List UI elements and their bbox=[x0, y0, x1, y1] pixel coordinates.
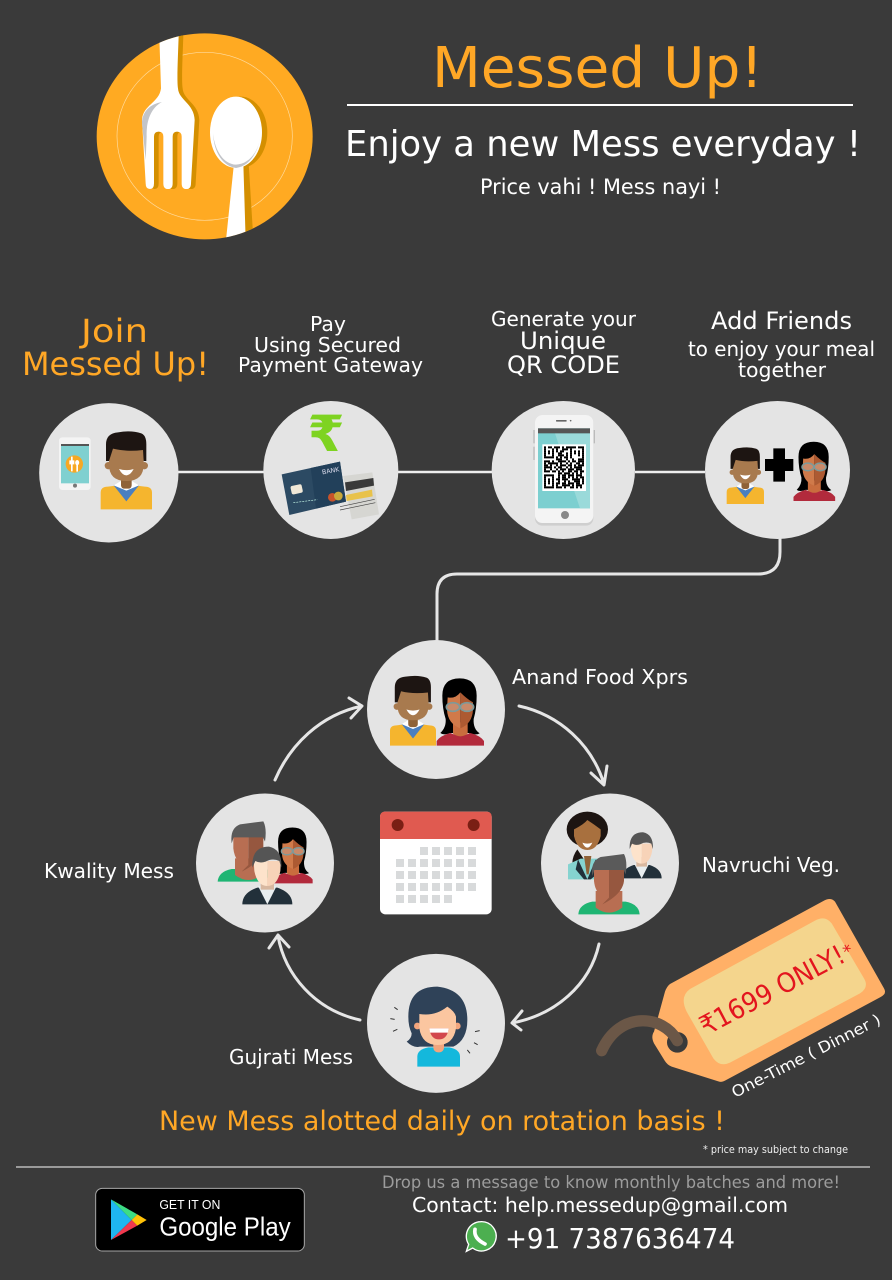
step 2 heading: Using Secured bbox=[254, 333, 401, 357]
fork and spoon shadows bbox=[147, 27, 267, 233]
step 2 icon: rupee and cards bbox=[263, 401, 398, 539]
title: Messed Up! bbox=[432, 36, 763, 101]
footer divider bbox=[16, 1166, 870, 1168]
price text: ₹1699 ONLY! bbox=[695, 940, 851, 1042]
cycle right: Navruchi Veg. icon bbox=[541, 793, 679, 932]
tagline: Price vahi ! Mess nayi ! bbox=[480, 175, 721, 199]
icon: WhatsApp bbox=[466, 1222, 496, 1251]
cycle left: Kwality Mess icon bbox=[196, 793, 334, 932]
step 4 heading: Add Friends bbox=[711, 307, 852, 335]
badge text bbox=[159, 1198, 291, 1241]
step 3 icon: phone with QR code bbox=[492, 401, 635, 539]
icon: plus bbox=[765, 448, 793, 482]
rotation caption: New Mess alotted daily on rotation basis ! bbox=[159, 1106, 725, 1137]
step 3 heading: QR CODE bbox=[507, 351, 620, 379]
step 1 heading bbox=[22, 312, 209, 383]
spoon bbox=[210, 97, 262, 168]
calendar bbox=[380, 812, 492, 914]
price note: One-Time ( Dinner ) bbox=[729, 1011, 884, 1102]
step 4 icon: man plus woman bbox=[705, 401, 850, 539]
step 4 heading bbox=[688, 307, 875, 382]
step 3 heading: Unique bbox=[520, 327, 606, 355]
step 1 icon: phone and man bbox=[39, 403, 178, 542]
step 3 heading: Generate your bbox=[491, 307, 637, 331]
QR code bbox=[542, 444, 586, 491]
label: Navruchi Veg.: Navruchi Veg. bbox=[702, 853, 840, 877]
badge text: GET IT ON bbox=[159, 1198, 220, 1212]
label: Gujrati Mess: Gujrati Mess bbox=[229, 1045, 353, 1069]
step 2 heading bbox=[238, 312, 423, 377]
subtitle: Enjoy a new Mess everyday ! bbox=[345, 124, 861, 165]
logo: plate with fork and spoon bbox=[97, 27, 313, 240]
step 1 heading: Join bbox=[79, 312, 148, 350]
step 2 heading: Payment Gateway bbox=[238, 353, 423, 377]
cycle top: Anand Food Xprs icon bbox=[367, 640, 505, 779]
icon: play triangle bbox=[111, 1199, 147, 1240]
icon: rupee: ₹ bbox=[307, 405, 345, 463]
phone number: +91 7387636474 bbox=[505, 1222, 735, 1255]
step 4 heading: to enjoy your meal bbox=[688, 337, 875, 361]
step 2 heading: Pay bbox=[310, 312, 346, 336]
badge text: Google Play bbox=[159, 1211, 291, 1241]
step 1 heading: Messed Up! bbox=[22, 345, 209, 383]
fork bbox=[142, 27, 195, 189]
footer message: Drop us a message to know monthly batches and more! bbox=[382, 1173, 840, 1193]
icon: back card bbox=[340, 472, 379, 519]
step 4 heading: together bbox=[738, 358, 827, 382]
Google Play badge bbox=[96, 1188, 304, 1251]
cycle bottom: Gujrati Mess icon bbox=[367, 954, 505, 1093]
step connector lines bbox=[178, 471, 705, 473]
contact email: Contact: help.messedup@gmail.com bbox=[412, 1193, 788, 1217]
label: Kwality Mess: Kwality Mess bbox=[44, 859, 174, 883]
connector from steps to cycle bbox=[437, 538, 780, 641]
title underline bbox=[347, 104, 853, 106]
icon: bank card: BANK bbox=[321, 466, 341, 476]
step 3 heading bbox=[491, 307, 637, 379]
price disclaimer: * price may subject to change bbox=[703, 1144, 848, 1156]
label: Anand Food Xprs: Anand Food Xprs bbox=[512, 665, 688, 689]
cycle arrows bbox=[269, 698, 607, 1030]
price tag bbox=[602, 899, 885, 1082]
price asterisk: * bbox=[840, 941, 857, 962]
